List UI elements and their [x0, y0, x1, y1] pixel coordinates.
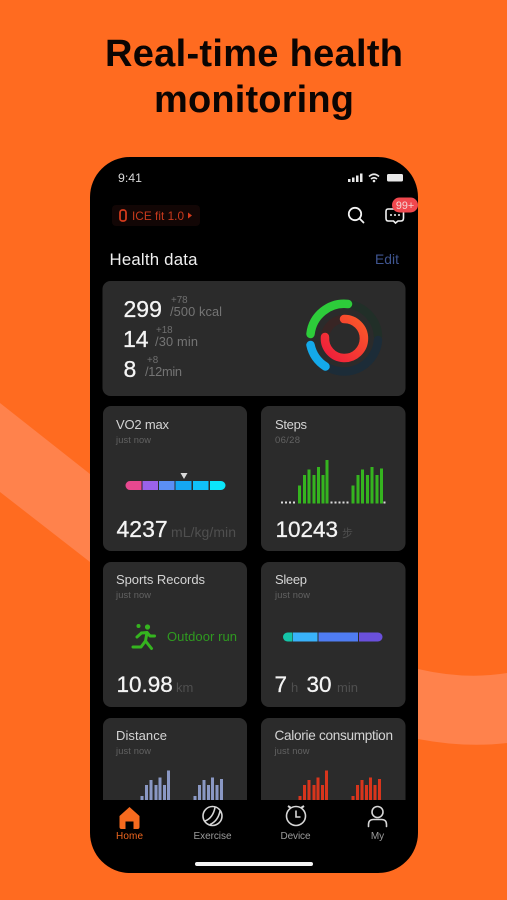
panel: activity summary: /30 min [155, 334, 198, 349]
bar chart: distance [140, 770, 223, 801]
panel: sports records [103, 562, 247, 707]
panel: activity summary: /12min [145, 364, 182, 379]
tab: home: Home [116, 831, 143, 842]
panel: sleep: Sleep [275, 572, 307, 587]
icon: search [349, 208, 364, 222]
panel: sports records: Sports Records [116, 572, 206, 587]
panel: sleep [261, 562, 406, 707]
tab: exercise: Exercise [194, 831, 232, 842]
panel: steps: Steps [275, 417, 308, 432]
panel: activity summary: 8 [124, 356, 136, 382]
panel: steps: 10243 [276, 517, 338, 542]
tab: device: Device [280, 831, 311, 842]
status bar [118, 171, 403, 185]
panel: sports records: just now [115, 590, 151, 600]
bottom navigation [116, 806, 386, 842]
bar chart: steps [298, 460, 383, 504]
panel: calorie consumption: just now [274, 746, 310, 756]
panel: steps: 步 [342, 527, 353, 540]
gauge bar [126, 473, 226, 490]
panel: calorie consumption: Calorie consumption [274, 728, 393, 743]
panel: activity summary: +78 [171, 295, 188, 306]
device selector: ICE fit 1.0 [132, 209, 184, 223]
panel: VO2 max [103, 406, 247, 551]
status bar: 9:41 [118, 171, 142, 185]
device selector [112, 205, 200, 226]
panel: distance: just now [115, 746, 151, 756]
icon: messages with badge: 99+ [396, 200, 414, 212]
panel: activity summary: +18 [156, 325, 173, 336]
panel: calorie consumption [261, 718, 406, 800]
bar chart: calories [298, 770, 381, 801]
panel: sleep: 30 [306, 672, 332, 697]
title: monitoring [154, 79, 354, 121]
panel: activity summary: 299 [124, 296, 162, 322]
sleep stage bar [283, 632, 382, 642]
tab: device [280, 806, 311, 842]
panel: sports records: Outdoor run [167, 629, 237, 644]
icon: messages with badge [386, 198, 418, 223]
panel: sports records: km [176, 680, 193, 695]
panel: VO2 max: just now [115, 435, 151, 445]
tab: my [368, 806, 386, 842]
panel: sleep: min [337, 680, 358, 695]
heading: health data: Health data [110, 250, 198, 269]
title: Real-time health [105, 33, 403, 75]
tab: home [116, 807, 143, 842]
edit link: Edit [375, 252, 399, 267]
phone [90, 157, 418, 873]
panel: distance: Distance [116, 728, 167, 743]
icon: runner [133, 624, 154, 648]
panel: activity summary [102, 281, 406, 396]
scrolling content [102, 281, 406, 818]
panel: VO2 max: 4237 [116, 516, 168, 542]
title [105, 33, 403, 121]
panel: steps: 06/28 [275, 435, 300, 446]
panel: activity summary: 14 [123, 326, 149, 352]
panel: sleep: 7 [274, 672, 287, 697]
panel: activity summary: /500 kcal [170, 304, 222, 319]
panel: VO2 max: mL/kg/min [171, 524, 236, 540]
panel: steps [261, 406, 406, 551]
activity rings [310, 304, 378, 372]
panel: VO2 max: VO2 max [116, 417, 170, 432]
panel: sleep: h [291, 680, 298, 695]
home indicator [195, 862, 313, 866]
panel: activity summary: +8 [147, 355, 159, 366]
tab: my: My [371, 831, 384, 842]
tab: exercise [194, 806, 232, 842]
panel: sleep: just now [274, 590, 310, 600]
panel: distance [103, 718, 247, 800]
panel: sports records: 10.98 [116, 672, 173, 697]
